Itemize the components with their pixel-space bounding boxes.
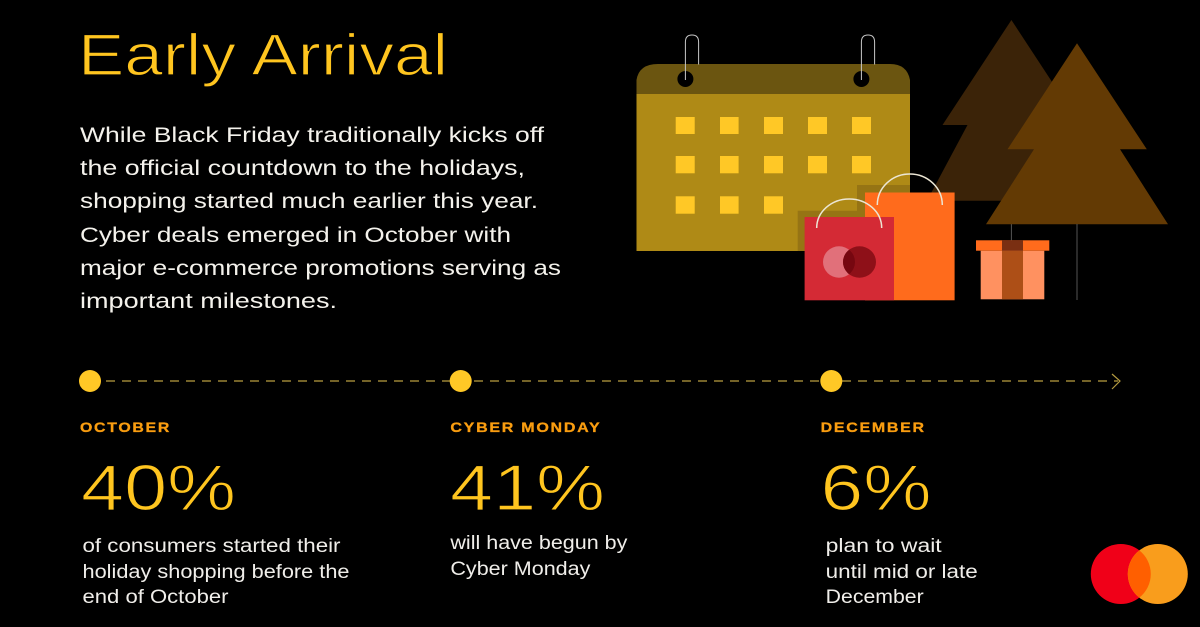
stat: October: OCTOBER: [80, 419, 171, 435]
stat: December: until mid or late: [826, 562, 978, 583]
stat: Cyber Monday: CYBER MONDAY: [450, 419, 601, 435]
stat: October: 40%: [81, 451, 236, 524]
stat: December: plan to wait: [826, 536, 943, 557]
timeline: [79, 370, 1120, 392]
stat: October: [80, 419, 350, 608]
stat: October: holiday shopping before the: [82, 562, 350, 583]
intro paragraph: shopping started much earlier this year.: [80, 190, 538, 213]
stat: December: 6%: [820, 451, 932, 524]
stat: Cyber Monday: [449, 419, 628, 580]
stat: December: December: [826, 587, 924, 608]
intro paragraph: While Black Friday traditionally kicks off: [80, 124, 544, 147]
logo: overlapping circles: [1091, 544, 1188, 604]
intro paragraph: important milestones.: [80, 290, 337, 313]
icon: front tree: [986, 43, 1168, 300]
intro paragraph: major e-commerce promotions serving as: [80, 257, 561, 280]
icon: back tree: [927, 20, 1096, 241]
icon: red shopping bag: [805, 199, 894, 300]
stat: October: of consumers started their: [82, 536, 341, 557]
icon: orange shopping bag: [865, 174, 955, 300]
illustration: holiday shopping scene: [636, 20, 1168, 300]
stat: October: end of October: [82, 587, 229, 608]
stat: Cyber Monday: 41%: [450, 451, 605, 524]
stat: Cyber Monday: will have begun by: [449, 533, 628, 554]
stat: December: DECEMBER: [821, 419, 926, 435]
intro paragraph: the official countdown to the holidays,: [80, 157, 525, 180]
stat: December: [820, 419, 978, 608]
stat: Cyber Monday: Cyber Monday: [450, 559, 591, 580]
icon: calendar: [636, 35, 910, 251]
intro paragraph: [80, 124, 561, 313]
arrow head: [1112, 374, 1120, 389]
intro paragraph: Cyber deals emerged in October with: [80, 224, 511, 247]
title: Early Arrival: [78, 23, 448, 88]
icon: gift box: [976, 240, 1049, 299]
